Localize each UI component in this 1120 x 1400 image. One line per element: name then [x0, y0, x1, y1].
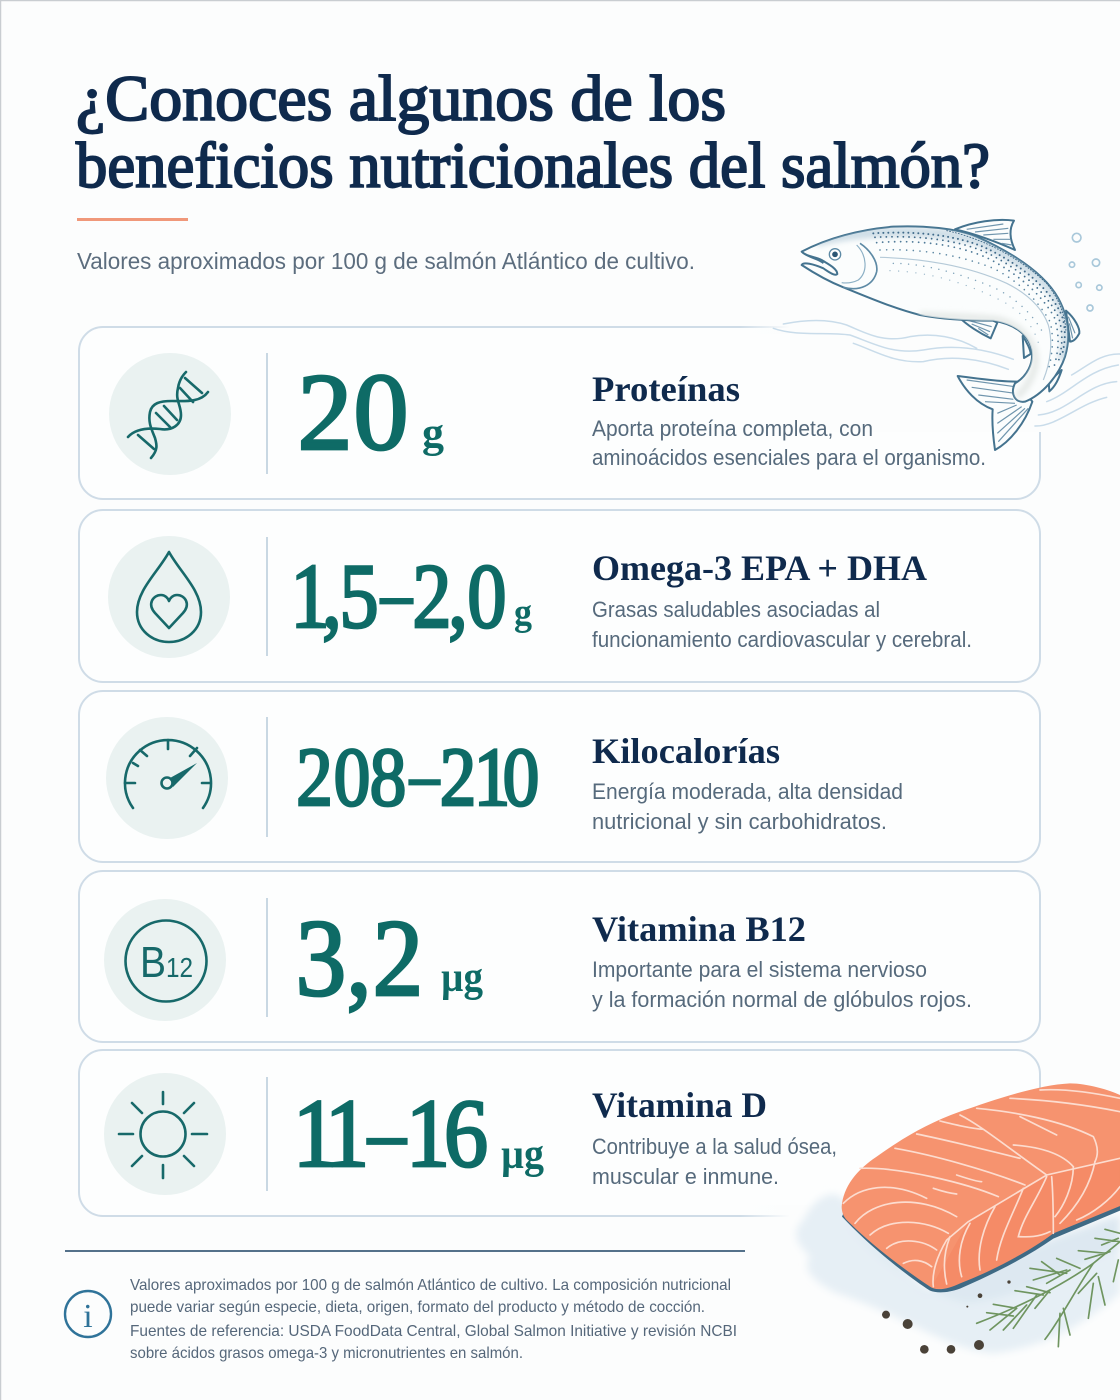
heading and description: Kilocalorías: [592, 731, 780, 771]
tail: [958, 376, 1032, 450]
gill and lateral line: [842, 243, 1051, 380]
back shading: [817, 232, 1066, 397]
muscle lines: [843, 1090, 1120, 1287]
heading and description: Vitamina B12: [592, 909, 806, 949]
watercolor wash: [796, 1194, 1120, 1353]
panel: proteínas: [79, 320, 1060, 499]
title: [76, 63, 990, 202]
value: 208–210: 210: [440, 731, 539, 824]
peppercorns: [882, 1280, 1011, 1354]
water ripples: [773, 320, 1120, 426]
heading and description: funcionamiento cardiovascular y cerebral.: [592, 627, 972, 652]
illustration: leaping salmon: [773, 220, 1120, 450]
value: 3,2 µg: [296, 897, 483, 1019]
heading and description: Proteínas: [592, 369, 740, 409]
subtitle: Valores aproximados por 100 g de salmón Atlántico de cultivo.: [77, 248, 695, 274]
eye and mouth: [802, 249, 841, 263]
icon: B12 badge: [104, 899, 226, 1021]
footnote: Valores aproximados por 100 g de salmón Atlántico de cultivo. La composición nutricional: [130, 1277, 731, 1294]
panel: vitamina B12: [79, 871, 1040, 1042]
heading and description: [592, 909, 972, 1012]
footnote: puede variar según especie, dieta, origen, formato del producto y método de cocción.: [130, 1299, 705, 1316]
accent rule: [77, 218, 188, 221]
icon: info: i: [83, 1298, 93, 1335]
value: 208–210: 208: [296, 731, 406, 824]
icon: sun: [104, 1073, 226, 1195]
heading and description: [592, 548, 972, 652]
value: 1,5–2,0 g: [290, 546, 532, 647]
dill sprigs: [977, 1229, 1120, 1347]
value: 3,2 µg: µg: [441, 955, 483, 1001]
heading and description: Omega-3 EPA + DHA: [592, 548, 927, 588]
panel: vitamina D: [79, 1050, 1060, 1225]
footnote: Fuentes de referencia: USDA FoodData Central, Global Salmon Initiative y revisión NCBI: [130, 1323, 737, 1340]
footer rule: [65, 1250, 745, 1252]
bubbles: [1069, 233, 1102, 311]
heading and description: Vitamina D: [592, 1085, 767, 1125]
speckles: [873, 231, 1066, 370]
value: 208–210: –: [409, 738, 440, 813]
value: 11–16 µg: –: [367, 1087, 407, 1180]
heading and description: Aporta proteína completa, con: [592, 416, 873, 441]
heading and description: Contribuye a la salud ósea,: [592, 1134, 837, 1159]
fish body: [802, 226, 1068, 402]
heading and description: y la formación normal de glóbulos rojos.: [592, 987, 972, 1012]
heading and description: [592, 1085, 837, 1189]
value: 1,5–2,0 g: 2,0: [412, 546, 507, 647]
heading and description: aminoácidos esenciales para el organismo.: [592, 445, 986, 470]
heading and description: [592, 731, 903, 834]
fins: [876, 220, 1079, 450]
value: 1,5–2,0 g: –: [380, 553, 413, 634]
heading and description: [592, 369, 986, 470]
icon: drop with heart: [108, 536, 230, 658]
icon: B12 badge: 12: [166, 952, 193, 983]
value: 1,5–2,0 g: 1,5: [290, 546, 379, 647]
heading and description: nutricional y sin carbohidratos.: [592, 809, 887, 834]
icon: B12 badge: B: [140, 938, 166, 987]
end face shade: [932, 1158, 1120, 1288]
value: 11–16 µg: 11: [293, 1080, 369, 1188]
title: ¿Conoces algunos de los: [76, 63, 726, 135]
heading and description: Importante para el sistema nervioso: [592, 957, 927, 982]
value: 20 g: 20: [298, 351, 408, 473]
icon: gauge: [106, 717, 228, 839]
value: 20 g: g: [422, 411, 444, 457]
panel: omega-3: [79, 510, 1040, 682]
title: beneficios nutricionales del salmón?: [76, 130, 990, 202]
illustration: salmon fillet with dill and pepper: [796, 1083, 1120, 1354]
heading and description: Energía moderada, alta densidad: [592, 779, 903, 804]
value: 3,2 µg: 3,2: [296, 897, 423, 1019]
value: 11–16 µg: µg: [501, 1132, 544, 1178]
footnote: [130, 1277, 737, 1362]
icon: dna: [109, 353, 231, 475]
footnote: sobre ácidos grasos omega-3 y micronutrientes en salmón.: [130, 1345, 523, 1362]
fillet underside: [842, 1203, 1120, 1292]
value: 1,5–2,0 g: g: [514, 592, 532, 634]
icon: info: [65, 1291, 111, 1337]
fillet flesh: [842, 1083, 1120, 1289]
heading and description: muscular e inmune.: [592, 1164, 779, 1189]
heading and description: Grasas saludables asociadas al: [592, 597, 880, 622]
value: 11–16 µg: 16: [406, 1080, 488, 1188]
value: 11–16 µg: [293, 1080, 544, 1188]
panel: kilocalorías: [79, 691, 1040, 862]
